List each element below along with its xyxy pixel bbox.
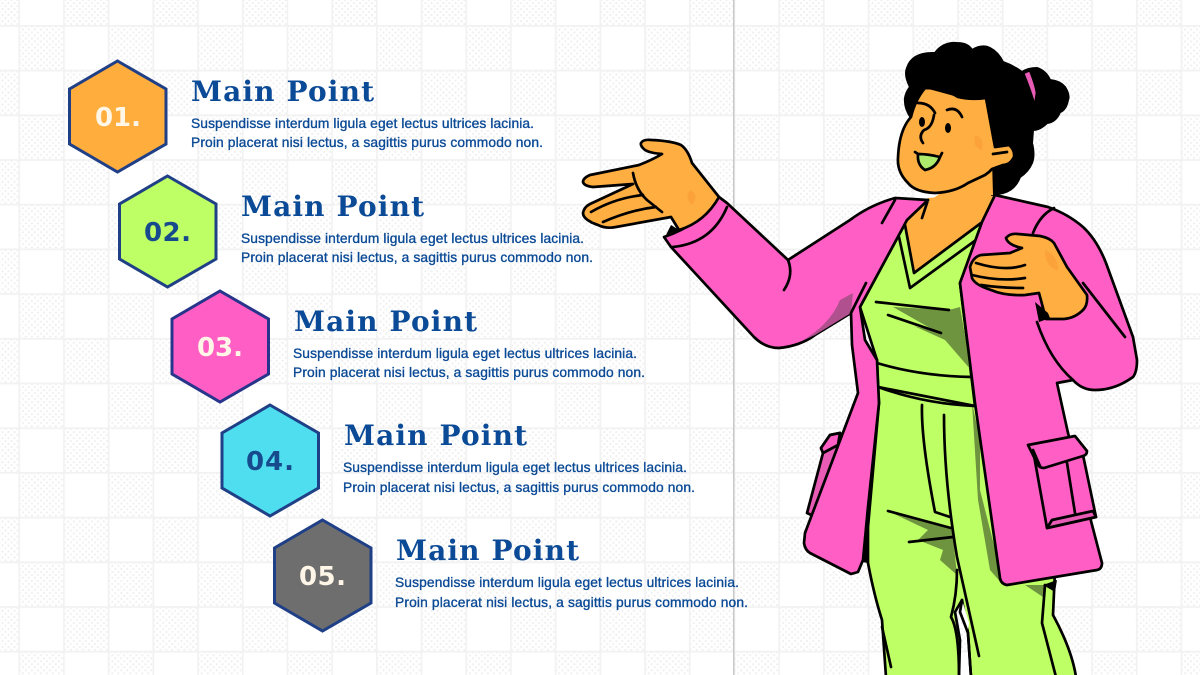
number 05: 05. [299, 562, 346, 592]
point 05 [274, 520, 748, 631]
trousers [862, 387, 1076, 675]
belt lines [877, 363, 975, 406]
hexagon 01 [70, 61, 166, 172]
ear line [993, 152, 1007, 154]
hexagon 04 [222, 405, 318, 516]
number 04: 04. [246, 447, 294, 477]
body 05: Proin placerat nisi lectus, a sagittis purus commodo non. [395, 595, 748, 610]
body 01: Proin placerat nisi lectus, a sagittis purus commodo non. [191, 135, 543, 150]
trouser lines [922, 405, 950, 517]
head [898, 43, 1069, 202]
jacket left flap pocket [807, 433, 845, 520]
body 04: Suspendisse interdum ligula eget lectus ultrices lacinia. [343, 460, 687, 475]
face shading [974, 135, 983, 150]
top and neck [860, 192, 995, 406]
body 01: Suspendisse interdum ligula eget lectus ultrices lacinia. [191, 116, 534, 131]
body 02: Proin placerat nisi lectus, a sagittis purus commodo non. [241, 250, 593, 265]
number 03: 03. [197, 333, 243, 363]
hexagon 02 [120, 176, 216, 287]
hair bangs [915, 60, 1000, 100]
hexagon 03 [172, 291, 268, 402]
brows and nose [918, 103, 962, 117]
heading 04: Main Point [344, 419, 527, 452]
hexagon 05 [274, 520, 371, 631]
number 01: 01. [95, 103, 141, 133]
heading 01: Main Point [191, 75, 374, 108]
left hand [583, 140, 719, 235]
point 04 [222, 405, 695, 516]
hair ribbon [1023, 70, 1037, 107]
heading 03: Main Point [294, 305, 477, 338]
eyes [919, 117, 925, 127]
collar lines [899, 223, 981, 288]
face [898, 88, 1014, 193]
right hand [970, 234, 1087, 322]
body 02: Suspendisse interdum ligula eget lectus ultrices lacinia. [241, 231, 584, 246]
body 04: Proin placerat nisi lectus, a sagittis purus commodo non. [343, 480, 695, 495]
arm shadow [664, 197, 928, 574]
neck fill [928, 160, 993, 202]
body 05: Suspendisse interdum ligula eget lectus ultrices lacinia. [395, 575, 739, 590]
jacket right panel and sleeve [960, 195, 1137, 585]
skin at neckline [905, 192, 995, 273]
point 01 [70, 61, 543, 172]
point 03 [172, 291, 645, 402]
trouser shadows [972, 403, 1003, 585]
jacket left panel and arm [664, 197, 928, 574]
heading 05: Main Point [396, 534, 579, 567]
shirt shadow [893, 307, 971, 370]
body 03: Proin placerat nisi lectus, a sagittis purus commodo non. [293, 365, 645, 380]
patch pocket [1033, 450, 1096, 528]
mouth [918, 154, 940, 170]
number 02: 02. [144, 218, 191, 248]
bun and hair [905, 43, 1069, 195]
heading 02: Main Point [241, 190, 424, 223]
body 03: Suspendisse interdum ligula eget lectus ultrices lacinia. [293, 346, 637, 361]
point 02 [120, 176, 593, 287]
